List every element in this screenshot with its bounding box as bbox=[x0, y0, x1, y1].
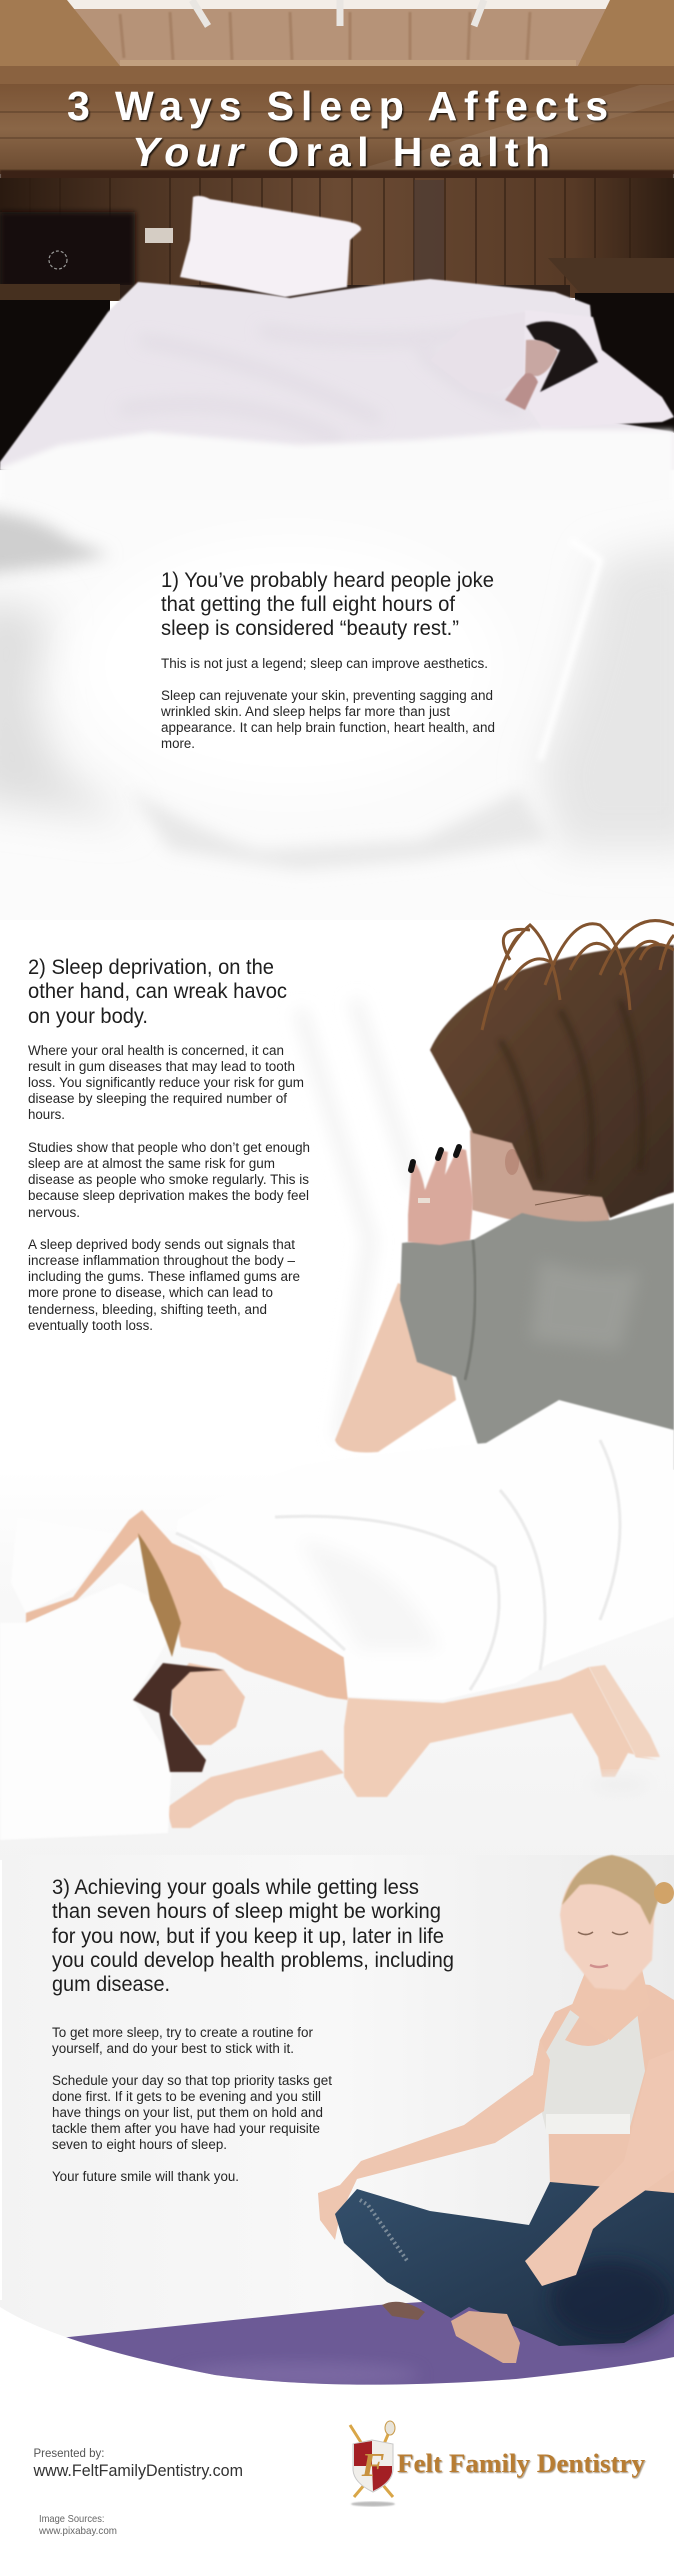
title line 2: Your Oral Health bbox=[132, 129, 550, 175]
body 1: This is not just a legend; sleep can improve aesthetics. bbox=[161, 656, 488, 671]
legs bbox=[344, 1667, 658, 1797]
logo shadow bbox=[351, 2502, 395, 2506]
sloped wood left bbox=[0, 0, 125, 72]
logo: Felt Family Dentistry bbox=[350, 2421, 645, 2506]
back foot bbox=[382, 2302, 425, 2320]
ceiling wood panel bbox=[120, 12, 530, 60]
top pillow bbox=[11, 1517, 116, 1613]
soft background bbox=[0, 1470, 674, 1870]
back and arm skin bbox=[26, 1510, 348, 1700]
title bbox=[67, 83, 608, 175]
front foot bbox=[451, 2311, 520, 2363]
back of arm bbox=[335, 1283, 456, 1452]
front pillow bbox=[0, 1583, 172, 1840]
ear bbox=[505, 1149, 519, 1175]
gray t-shirt bbox=[400, 1203, 674, 1470]
knee detail bbox=[360, 2200, 408, 2262]
body 2 paragraph 1 bbox=[28, 1043, 304, 1122]
presented label: Presented by: bbox=[34, 2448, 104, 2460]
skylight window bbox=[60, 0, 620, 9]
body 1: more. bbox=[161, 736, 195, 751]
body 3 paragraph 2: seven to eight hours of sleep. bbox=[52, 2137, 227, 2152]
light switch bbox=[145, 228, 173, 243]
body 2 paragraph 2: sleep are at almost the same risk for gum bbox=[28, 1156, 275, 1171]
ring bbox=[418, 1198, 430, 1203]
hand with dark nails bbox=[408, 1148, 473, 1245]
heading 3: gum disease. bbox=[52, 1973, 170, 1996]
face bbox=[172, 1663, 245, 1745]
body 2 paragraph 2: Studies show that people who don’t get enough bbox=[28, 1140, 310, 1155]
hair bun bbox=[654, 1882, 674, 1904]
body 2 paragraph 3: tenderness, bleeding, shifting teeth, and bbox=[28, 1302, 267, 1317]
head bbox=[560, 1857, 655, 1990]
body 2 paragraph 3 bbox=[28, 1237, 300, 1333]
far foot bbox=[589, 1665, 660, 1757]
body 1 bbox=[160, 656, 495, 751]
neck bbox=[570, 1960, 650, 2040]
website: www.FeltFamilyDentistry.com bbox=[33, 2461, 243, 2480]
heading 2: on your body. bbox=[28, 1005, 148, 1028]
body 2 paragraph 3: increase inflammation throughout the body – bbox=[28, 1253, 295, 1268]
photo: woman asleep under white duvet bbox=[0, 1400, 674, 1870]
body 2 paragraph 3: including the gums. These inflamed gums are bbox=[28, 1269, 300, 1284]
loose hair strands bbox=[482, 921, 674, 1030]
photo: white bed sheets behind text 1 bbox=[0, 500, 674, 920]
shield monogram: F bbox=[361, 2447, 385, 2484]
sloped wood right bbox=[575, 0, 674, 72]
wood wall behind title bbox=[0, 84, 674, 174]
sheet folds bbox=[300, 1000, 415, 1440]
title line 1: 3 Ways Sleep Affects bbox=[67, 83, 608, 129]
body 3 paragraph 1 bbox=[52, 2025, 313, 2056]
body 2 paragraph 1: result in gum diseases that may lead to tooth bbox=[28, 1059, 295, 1074]
text block 2 bbox=[28, 956, 310, 1333]
body 1: appearance. It can help brain function, heart health, and bbox=[161, 720, 495, 735]
left shelf bbox=[0, 284, 120, 301]
heading 1: that getting the full eight hours of bbox=[161, 593, 455, 616]
left gray folds bbox=[0, 600, 130, 820]
body 3 paragraph 2: done first. If it gets to be evening and you still bbox=[52, 2089, 321, 2104]
right gray folds bbox=[540, 540, 674, 850]
dark shelf with speaker bbox=[0, 212, 135, 288]
body 2 paragraph 3: more prone to disease, which can lead to bbox=[28, 1285, 273, 1300]
duvet fold over sleeper bbox=[430, 312, 525, 393]
left arm bbox=[318, 2040, 550, 2240]
body 2 paragraph 1: hours. bbox=[28, 1107, 65, 1122]
footer: image sources bbox=[38, 2513, 117, 2537]
blonde hair strand bbox=[138, 1533, 181, 1657]
heading 3: for you now, but if you keep it up, later in life bbox=[52, 1925, 444, 1948]
duvet bbox=[176, 1400, 674, 1700]
heading 1: sleep is considered “beauty rest.” bbox=[161, 617, 459, 640]
leggings bbox=[335, 2182, 674, 2346]
body 2 paragraph 1: loss. You significantly reduce your risk for gum bbox=[28, 1075, 304, 1090]
heading 3: 3) Achieving your goals while getting less bbox=[52, 1876, 419, 1899]
speaker dial bbox=[49, 251, 67, 269]
right shelf bbox=[548, 258, 674, 293]
heading 2: 2) Sleep deprivation, on the bbox=[28, 956, 274, 979]
sleeper hair bbox=[526, 321, 598, 392]
torso bbox=[533, 1980, 674, 2200]
heading 2 bbox=[28, 956, 287, 1028]
body 3 paragraph 2: have things on your list, put them on hold and bbox=[52, 2105, 323, 2120]
hair mass bbox=[430, 945, 674, 1218]
dark rail bbox=[0, 170, 674, 180]
sleeper pillow bbox=[520, 310, 674, 428]
body 2 paragraph 3: A sleep deprived body sends out signals that bbox=[28, 1237, 295, 1252]
sports bra bbox=[542, 2010, 645, 2129]
body 3 paragraph 2: tackle them after you have had your requisite bbox=[52, 2121, 320, 2136]
body 2 paragraph 3: eventually tooth loss. bbox=[28, 1318, 153, 1333]
body 3 paragraph 1: yourself, and do your best to stick with it. bbox=[52, 2041, 294, 2056]
text block 1 bbox=[160, 569, 495, 751]
foot shadow bbox=[590, 1777, 650, 1793]
body 3 paragraph 2 bbox=[52, 2073, 332, 2152]
logo wordmark: Felt Family Dentistry bbox=[397, 2449, 645, 2478]
neck and skin bbox=[470, 1130, 610, 1225]
body 1: wrinkled skin. And sleep helps far more than just bbox=[160, 704, 450, 719]
right arm and hand bbox=[525, 2186, 646, 2286]
text block 3 bbox=[52, 1876, 454, 2184]
heading 1 bbox=[161, 569, 494, 640]
plank wall bbox=[0, 178, 674, 298]
closed eyes and lips bbox=[578, 1932, 628, 1934]
heading 3: you could develop health problems, including bbox=[52, 1949, 454, 1972]
heading 1: 1) You’ve probably heard people joke bbox=[161, 569, 494, 592]
dark hair bbox=[133, 1663, 224, 1772]
lower arm and hand bbox=[166, 1750, 344, 1828]
heading 3: than seven hours of sleep might be working bbox=[52, 1900, 441, 1923]
white foreground blanket bbox=[0, 430, 674, 540]
body 1: Sleep can rejuvenate your skin, preventing sagging and bbox=[161, 688, 493, 703]
sources url: www.pixabay.com bbox=[38, 2525, 117, 2537]
footer: presented by bbox=[33, 2448, 243, 2480]
sleeper face bbox=[525, 340, 558, 376]
central white highlight bbox=[80, 540, 500, 790]
body 2 paragraph 1: Where your oral health is concerned, it can bbox=[28, 1043, 284, 1058]
heading 2: other hand, can wreak havoc bbox=[28, 980, 287, 1003]
ceiling backing bbox=[0, 0, 674, 72]
photo: yoga woman panel bbox=[0, 1855, 674, 2400]
hair bbox=[562, 1855, 660, 1925]
back pillow bbox=[180, 196, 361, 297]
body 2 paragraph 2: because sleep deprivation makes the body feel bbox=[28, 1188, 309, 1203]
pillow folds centre bbox=[130, 790, 550, 870]
body 2 paragraph 2: disease as people who smoke regularly. This is bbox=[28, 1172, 309, 1187]
body 3 paragraph 3: Your future smile will thank you. bbox=[52, 2169, 239, 2184]
duvet bbox=[0, 279, 674, 470]
body 2 paragraph 1: disease by sleeping the required number of bbox=[28, 1091, 287, 1106]
necklace bbox=[535, 1195, 590, 1205]
purple yoga mat bbox=[66, 2302, 674, 2385]
shield bbox=[353, 2440, 393, 2492]
wooden beam bbox=[0, 66, 674, 86]
photo: woman with brown hair lying on sheet bbox=[300, 921, 674, 1470]
wall clipped by curve bbox=[0, 1855, 674, 2400]
sources label: Image Sources: bbox=[39, 2513, 104, 2525]
body 2 paragraph 2: nervous. bbox=[28, 1205, 80, 1220]
toothbrush and mirror handles bbox=[350, 2425, 393, 2497]
heading 3 bbox=[52, 1876, 454, 1996]
body 3 paragraph 1: To get more sleep, try to create a routine for bbox=[52, 2025, 313, 2040]
body 2 paragraph 2 bbox=[28, 1140, 310, 1220]
body 3 paragraph 2: Schedule your day so that top priority tasks get bbox=[52, 2073, 332, 2088]
studio wall bbox=[0, 1855, 674, 2337]
top left pillow fold bbox=[0, 510, 110, 575]
photo: bedroom header bbox=[0, 0, 674, 540]
white sheet base bbox=[0, 500, 674, 920]
